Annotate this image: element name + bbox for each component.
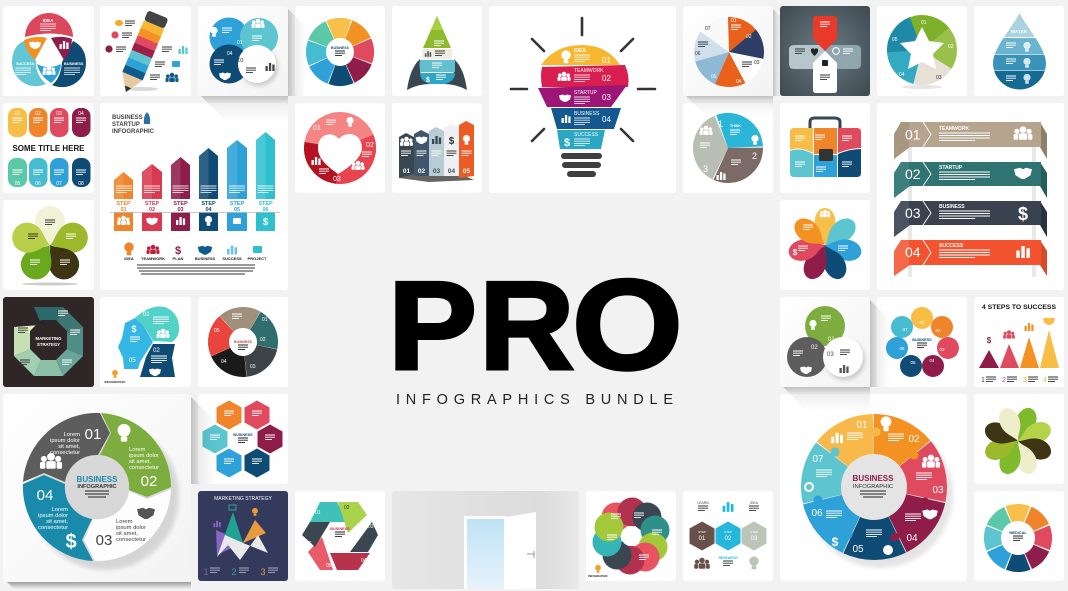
panel: four circle overlap with shadow [198, 6, 288, 96]
bulb segment: startup: 03 [602, 93, 611, 102]
subheading: infographics bundle: INFOGRAPHICS BUNDLE [396, 392, 673, 408]
panel: medical octagon ring: MEDICAL [1009, 531, 1027, 535]
panel: five segment ring: 05 [214, 328, 220, 334]
panel: three hexagon steps: STEP [698, 530, 706, 534]
segment 03 [84, 489, 171, 561]
panel: head puzzle infographic: 05 [129, 358, 136, 364]
panel: head puzzle infographic [100, 297, 191, 387]
panel: hexagon ring [295, 491, 385, 581]
step labels: 03 [177, 207, 184, 213]
bulb segment: success: SUCCESS [574, 132, 599, 138]
panel: three-part circle with idea: IDEA [43, 18, 54, 23]
segment 01: consectetur [50, 450, 80, 456]
panel: 4 steps to success: $ [987, 336, 992, 345]
panel: five arrow columns: 01 [403, 168, 410, 175]
panel: heart ring infographic: 03 [333, 176, 341, 183]
panel: heart ring infographic [295, 103, 385, 193]
panel: 4 steps to success: 3 [1023, 377, 1027, 384]
panel: three-part circle with idea: SUCCESS [16, 62, 35, 66]
heading: business startup infographic [112, 115, 155, 135]
banner 01 teamwork: TEAMWORK [939, 126, 969, 132]
banner 04 success: SUCCESS [939, 243, 964, 249]
door frame [464, 516, 507, 589]
panel: water drop infographic: WATER [1011, 29, 1028, 34]
step labels: STEP [201, 201, 216, 207]
panel: four circle overlap with shadow: 02 [246, 48, 252, 54]
icon squares [114, 212, 275, 231]
heading: business startup infographic: STARTUP [112, 122, 140, 128]
panel: five segment ring: 02 [260, 337, 266, 343]
panel: dark marketing strategy mountains [198, 491, 288, 581]
banner 04 success [894, 240, 1047, 276]
panel: dark octagon marketing strategy: STRATEGY [37, 342, 60, 347]
heading: some title here: SOME TITLE HERE [12, 144, 84, 153]
panel: ten circle flower ring [586, 491, 676, 581]
panel: three circles [780, 297, 870, 387]
panel: three slice pie: 2 [752, 151, 757, 161]
banner 03 business [894, 201, 1047, 237]
panel: five petal flower [3, 200, 94, 290]
panel: three slice pie: 3 [703, 164, 708, 174]
icon legend: $ [175, 245, 181, 257]
panel: seven petal flower: $ [793, 248, 798, 257]
bulb segment: teamwork: 02 [602, 74, 611, 83]
panel: 4 steps to success: 1 [981, 377, 985, 384]
step labels: STEP [230, 201, 245, 207]
panel: green eight petal flower [974, 394, 1064, 484]
banner 03 business: 03 [905, 205, 921, 221]
heart cut-out [318, 134, 362, 174]
panel: big puzzle ring infographic [780, 394, 967, 581]
panel: star ring infographic: 04 [899, 72, 905, 78]
panel: seven circle ring: 03 [939, 347, 945, 352]
panel: head puzzle infographic: 02 [153, 348, 160, 354]
heading: business startup infographic: INFOGRAPHIC [112, 129, 155, 135]
panel: five arrow columns: 03 [433, 168, 440, 175]
panel: seven petal flower [780, 200, 870, 290]
segment 02 [100, 413, 171, 497]
segment 01 [23, 413, 110, 482]
panel: pie with seven slices [683, 6, 773, 96]
panel: three slice pie [683, 103, 773, 193]
panel: dark marketing strategy mountains: 2 [231, 567, 237, 577]
panel: briefcase infographic [780, 103, 870, 193]
panel: business startup bar infographic: BUSINESS [195, 256, 216, 261]
panel: six hexagons: BUSINESS [233, 433, 253, 437]
segment 02: sit amet, [129, 459, 151, 465]
light rays [511, 18, 655, 141]
panel: three hexagon steps: 01 [699, 536, 706, 542]
step labels: STEP [116, 201, 131, 207]
puzzle knobs [814, 428, 930, 542]
step labels: 06 [262, 207, 269, 213]
panel: head puzzle infographic: INFOGRAPHIC [104, 380, 126, 384]
panel: hexagon ring: 01 [315, 510, 321, 516]
panel: three circles: 01 [828, 337, 835, 343]
panel: big puzzle ring infographic: 01 [856, 420, 868, 431]
panel: star ring infographic [877, 6, 967, 96]
panel: pills with some title here: 01 [15, 111, 20, 117]
panel: big puzzle ring infographic: 04 [906, 533, 918, 544]
panel: star ring infographic: 05 [892, 37, 898, 43]
panel: hexagon ring: 04 [361, 558, 367, 564]
panel: heart ring infographic: 01 [313, 125, 321, 132]
arrow bars [114, 132, 275, 199]
banner 02 startup: 02 [905, 166, 921, 182]
panel: big puzzle ring infographic: 03 [932, 485, 944, 496]
panel: three circles: 03 [827, 352, 834, 358]
panel: head puzzle infographic: $ [131, 324, 137, 334]
segment 02: consectetur [129, 465, 159, 471]
step labels: STEP [258, 201, 273, 207]
heading: PRO: O [572, 252, 683, 396]
bulb segment: business [551, 108, 621, 129]
panel: five segment ring [198, 297, 288, 387]
panel: three-part circle with idea: BUSINESS [64, 62, 84, 66]
panel: five segment ring: BUSINESS [234, 340, 253, 344]
banner 02 startup [894, 162, 1047, 198]
panel: four circle overlap with shadow: 04 [227, 51, 233, 57]
panel: pills with some title here: 04 [78, 111, 84, 117]
panel: seven circle ring: 06 [899, 346, 905, 351]
banner 03 business: $ [1018, 204, 1028, 224]
panel: business startup bar infographic: PROJECT [248, 256, 267, 261]
bulb base [561, 153, 602, 177]
banner 01 teamwork [894, 122, 1047, 159]
panel: pie with seven slices: 04 [736, 79, 742, 85]
panel: four circle overlap with shadow: 01 [237, 40, 243, 46]
panel: hexagon ring: 06 [306, 541, 312, 547]
panel: rocket infographic [392, 6, 482, 96]
panel: dark marketing strategy mountains: 1 [203, 567, 209, 577]
door leaf [507, 512, 536, 589]
step labels: 04 [205, 207, 212, 213]
heading: PRO [388, 252, 683, 396]
panel: five arrow columns [392, 103, 482, 193]
step labels: 05 [234, 207, 240, 213]
step labels: STEP [145, 201, 160, 207]
panel: pills with some title here: 02 [35, 111, 41, 117]
segment 03: Lorem [116, 519, 133, 525]
panel: pills with some title here: 08 [78, 181, 84, 187]
panel: big puzzle ring infographic: 05 [852, 544, 864, 555]
panel: five arrow columns: 02 [418, 168, 425, 175]
segment 03: sit amet, [116, 531, 138, 537]
banner 03 business: BUSINESS [939, 204, 965, 210]
panel: medical octagon ring [974, 491, 1064, 581]
panel: pie with seven slices: 06 [695, 51, 701, 57]
segment 04: ipsum dolor [38, 513, 68, 519]
panel: seven circle ring: 02 [935, 328, 941, 333]
bulb segment: startup: STARTUP [574, 90, 598, 96]
icon legend [124, 242, 262, 257]
segment 04: consectetur [38, 525, 68, 531]
title block: PRO Infographics Bundle [388, 252, 683, 408]
panel: ribbon banners [877, 103, 1064, 290]
panel: four circle overlap with shadow: 03 [238, 58, 244, 64]
bulb segment: idea: 01 [602, 56, 611, 65]
panel: pie ring eight segments: BUSINESS [331, 46, 350, 50]
segment 04: sit amet, [46, 519, 68, 525]
step labels: STEP [173, 201, 188, 207]
centre label [77, 475, 118, 497]
panel: pie with seven slices: 03 [754, 60, 760, 66]
panel: pie with seven slices: 07 [705, 26, 711, 32]
panel: dark marketing strategy mountains: MARKETING STRATEGY [214, 496, 273, 502]
panel: dark octagon marketing strategy: MARKETING [35, 336, 62, 341]
panel: dark octagon marketing strategy [3, 297, 94, 387]
panel: pills with some title here: 03 [56, 111, 62, 117]
segment 03: consectetur [116, 537, 146, 543]
panel: business startup bar infographic: TEAMWORK [141, 256, 165, 261]
pencil [116, 10, 168, 96]
panel: head puzzle infographic: 01 [143, 312, 150, 318]
panel: business startup bar infographic: PLAN [173, 256, 184, 261]
segment 03: 03 [96, 532, 112, 549]
banner 01 teamwork: 01 [905, 126, 921, 142]
panel: hexagon ring: 03 [368, 524, 374, 530]
bulb segment: teamwork: TEAMWORK [574, 68, 604, 74]
panel: seven circle ring [877, 297, 967, 387]
banner 04 success: 04 [905, 244, 921, 260]
bulb segment: idea: IDEA [574, 48, 586, 54]
bulb segment: teamwork [541, 65, 629, 87]
panel: 4 steps to success: 2 [1002, 377, 1006, 384]
segment 03: ipsum dolor [116, 525, 146, 531]
panel: business startup bar infographic [100, 103, 288, 290]
segment 04: 04 [37, 487, 53, 504]
panel: star ring infographic: 03 [936, 75, 942, 81]
panel: pie with seven slices: 01 [731, 18, 737, 24]
panel: five segment ring: 04 [221, 359, 227, 365]
heading: 4 STEPS TO SUCCESS [982, 304, 1056, 311]
bulb segment: business: 04 [602, 115, 611, 124]
panel: pie with seven slices: 02 [746, 34, 752, 40]
segment 04: $ [65, 531, 77, 553]
panel: hexagon ring: BUSINESS [330, 527, 350, 531]
step labels [116, 201, 273, 213]
centre label [853, 474, 894, 497]
panel: business startup bar infographic: SUCCESS [222, 256, 242, 261]
icon: rocket [144, 112, 150, 124]
panel: three hexagon steps: 03 [751, 536, 758, 542]
panel: light bulb infographic [489, 6, 676, 193]
panel: seven circle ring: 04 [929, 358, 935, 363]
bulb segment: startup [538, 85, 627, 107]
heading: PRO: R [479, 256, 575, 396]
centre label: BUSINESS [853, 474, 894, 483]
panel: ten circle flower ring: INFOGRAPHIC [588, 574, 608, 578]
panel: pie ring eight segments [295, 6, 385, 96]
step labels: 01 [120, 207, 127, 213]
segment 01: 01 [85, 426, 101, 443]
panel: three hexagon steps: LEARN [697, 501, 709, 505]
panel: hexagon ring: 05 [326, 563, 332, 569]
panel: three circles: 02 [811, 345, 818, 351]
panel: five arrow columns: $ [449, 136, 455, 147]
panel: heart ring infographic: 02 [366, 142, 374, 149]
segment 01: sit amet, [58, 444, 80, 450]
segment 02: ipsum dolor [129, 453, 159, 459]
panel: pills with some title here [3, 103, 94, 193]
star cut-out [900, 27, 944, 69]
panel: three hexagon steps: STEP [724, 530, 732, 534]
panel: star ring infographic: 01 [921, 20, 927, 26]
panel: pie with seven slices: 05 [711, 74, 717, 80]
heading: PRO: P [388, 254, 477, 396]
panel: 4 steps to success [974, 297, 1064, 387]
panel: pills with some title here: 06 [35, 181, 41, 187]
centre label: INFOGRAPHIC [853, 484, 893, 490]
panel: five arrow columns: 04 [448, 168, 455, 175]
panel: three-part circle with idea [3, 6, 94, 96]
panel: rocket infographic: $ [426, 77, 430, 84]
panel: three hexagon steps: RESEARCH [718, 556, 738, 560]
panel: dark marketing strategy mountains: 3 [260, 567, 266, 577]
panel: six hexagons [198, 394, 288, 484]
panel: dark cross infographic [780, 6, 870, 96]
panel: seven circle ring: 07 [902, 327, 908, 332]
panel: pills with some title here: 05 [15, 181, 20, 187]
panel: star ring infographic: 02 [948, 44, 954, 50]
segment 02: 02 [141, 473, 157, 490]
panel: water drop infographic [974, 6, 1064, 96]
panel: seven circle ring: 05 [910, 360, 916, 365]
segment 04 [23, 475, 93, 561]
panel: big puzzle ring infographic: 06 [811, 508, 823, 519]
centre label: INFOGRAPHIC [77, 484, 117, 490]
panel: pencil infographic [100, 6, 191, 96]
bulb segment: idea [541, 45, 620, 65]
segment 01: ipsum dolor [50, 438, 80, 444]
panel: hexagon ring: 02 [344, 505, 350, 511]
heading: business startup infographic: BUSINESS [112, 115, 143, 121]
panel: three hexagon steps: STEP [750, 530, 758, 534]
segment 02: Lorem [129, 447, 146, 453]
briefcase handle [810, 118, 840, 128]
panel: three hexagon steps: 02 [725, 536, 732, 542]
panel: big four part business ring [3, 394, 191, 582]
panel: three slice pie: THINK [730, 124, 741, 128]
segment 04: Lorem [52, 507, 68, 513]
panel: five arrow columns: 05 [463, 168, 470, 175]
panel: five segment ring: 01 [262, 317, 268, 323]
panel: business startup bar infographic: IDEA [124, 256, 134, 261]
panel: seven circle ring: 01 [919, 320, 925, 325]
panel: five segment ring: 03 [250, 364, 256, 370]
panel: big puzzle ring infographic: 02 [908, 434, 920, 445]
step labels: 02 [149, 207, 155, 213]
panel: seven circle ring: BUSINESS [912, 338, 932, 342]
segment 01: Lorem [64, 432, 80, 438]
panel: 4 steps to success: 4 [1043, 377, 1047, 384]
panel: big puzzle ring infographic: 07 [812, 454, 824, 465]
panel: big puzzle ring infographic: $ [832, 535, 839, 549]
panel: three hexagon steps [683, 491, 773, 581]
icon squares: $ [263, 217, 269, 228]
bulb segment: business: BUSINESS [574, 111, 600, 117]
panel: pills with some title here: 07 [56, 181, 62, 187]
bulb segment: success [557, 130, 605, 149]
panel: three slice pie: 1 [718, 119, 723, 129]
panel: open door [392, 491, 579, 589]
banner 02 startup: STARTUP [939, 165, 963, 171]
panel: three hexagon steps: IDEA [750, 501, 759, 505]
centre label: BUSINESS [77, 475, 118, 484]
bulb segment: success: $ [564, 137, 570, 149]
door handle [527, 551, 535, 558]
